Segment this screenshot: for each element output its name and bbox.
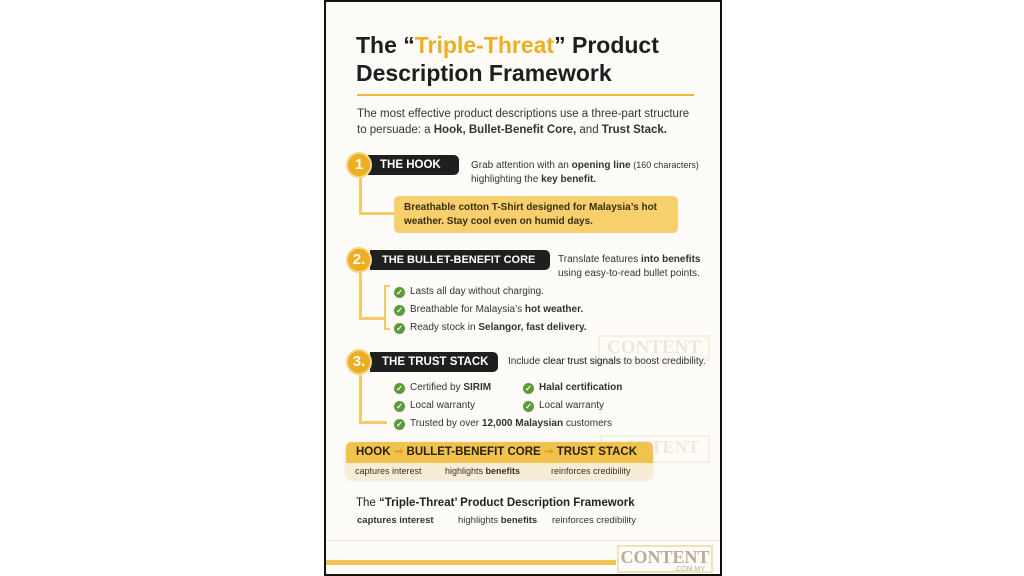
connector [359,375,362,423]
number badge [346,349,372,375]
bullets right: Halal certification [539,382,622,393]
summary bar: highlights benefits [445,466,520,476]
description: highlighting the key benefit. [471,174,596,185]
gold bottom line [326,560,616,565]
intro text: to persuade: a Hook, Bullet-Benefit Core, and Trust Stack. [357,124,667,136]
footer labels: captures interest [357,515,434,526]
title [356,32,659,86]
flow heading: HOOK ➞ BULLET-BENEFIT CORE ➞ TRUST STACK [356,446,637,458]
summary bar [346,442,653,479]
intro text: The most effective product descriptions use a three-part structure [357,108,689,120]
number badge: 2. [353,251,365,268]
section 3 [346,349,706,430]
footer labels: highlights benefits [458,515,537,526]
bullets left: ✓ [396,420,403,429]
watermark: CONTENT [607,337,701,358]
logo: CONTENT [620,547,710,567]
bullets right: Local warranty [539,400,604,411]
bullets right [523,382,622,412]
number badge: 1 [355,156,363,173]
number badge [346,247,372,273]
footer title: The “Triple-Threat’ Product Description Framework [356,497,635,509]
bullets left: ✓ [396,384,403,393]
bullets left: Local warranty [410,400,475,411]
pill: THE HOOK [380,159,441,171]
summary bar: reinforces credibility [551,466,631,476]
watermark [600,435,710,463]
connector lines [359,175,362,215]
pill [370,250,550,270]
number badge [346,152,372,178]
gold divider [357,94,694,96]
title: Description Framework [356,60,612,86]
faint divider [326,540,720,541]
logo: .COM.MY [674,566,705,573]
title: The “Triple-Threat” Product [356,32,659,58]
description: using easy-to-read bullet points. [558,268,700,279]
intro text [357,108,689,136]
panel: main card [324,0,722,576]
description: Translate features into benefits [558,254,700,265]
pill [370,352,498,372]
description [471,160,699,185]
bullets left: ✓ [396,402,403,411]
bullets: ✓ [396,288,403,297]
callout [394,196,678,233]
logo [617,545,713,573]
bullets right: ✓ [525,384,532,393]
bullets: Breathable for Malaysia’s hot weather. [410,304,583,315]
bullets: Ready stock in Selangor, fast delivery. [410,322,587,333]
section 2 [346,247,700,334]
watermark: CONTENT [610,437,700,457]
bullets left: Certified by SIRIM [410,382,491,393]
footer labels [357,515,636,526]
bracket [384,285,390,330]
bullets [394,286,587,334]
pill [368,155,459,175]
bullets left [394,382,612,430]
description: Grab attention with an opening line (160 characters) [471,160,699,171]
flow heading [346,442,653,463]
callout: Breathable cotton T-Shirt designed for Malaysia’s hot [404,202,657,213]
bullets: Lasts all day without charging. [410,286,544,297]
bullets: ✓ [396,324,403,333]
watermark [598,335,710,361]
description: Include clear trust signals to boost credibility. [508,356,706,367]
pill: THE BULLET-BENEFIT CORE [382,254,535,266]
description [558,254,700,279]
pill: THE TRUST STACK [382,356,488,368]
section 1: hook [346,152,699,185]
bullets: ✓ [396,306,403,315]
bullets left: Trusted by over 12,000 Malaysian customers [410,418,612,429]
number badge: 3. [353,353,365,370]
bullets right: ✓ [525,402,532,411]
callout: weather. Stay cool even on humid days. [404,216,593,227]
footer labels: reinforces credibility [552,515,636,526]
flow labels: captures interest [355,466,422,476]
